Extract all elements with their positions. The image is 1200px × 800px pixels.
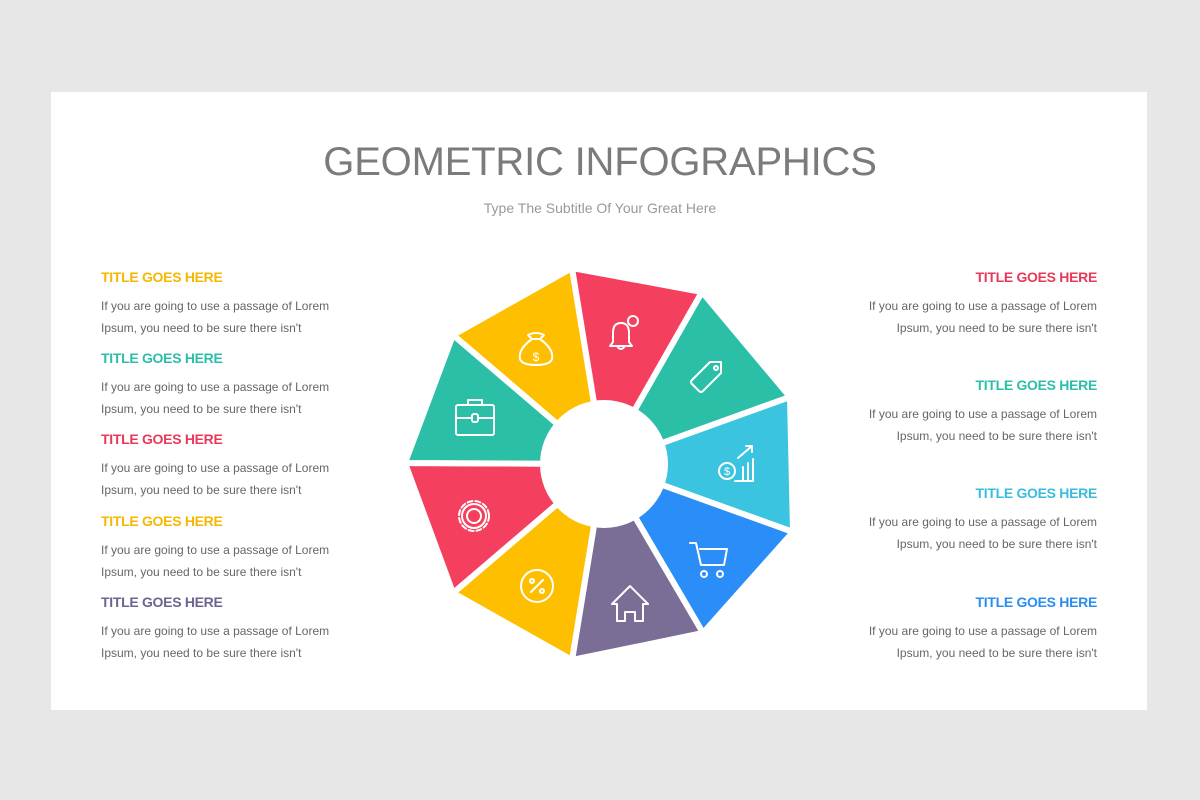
title: GEOMETRIC INFOGRAPHICS [323,140,877,184]
icon: briefcase [456,400,494,435]
left item 3: TITLE GOES HERE [101,431,223,447]
icon: home [612,586,648,621]
left item 2: TITLE GOES HERE [101,350,223,366]
card [51,92,1147,710]
right item 1: TITLE GOES HERE [975,269,1097,285]
left item 4 [101,513,329,579]
right item 1: If you are going to use a passage of Lorem Ipsum, you need to be sure there isn't [869,299,1097,335]
icon: bell [610,316,638,349]
left item 1 [101,269,329,335]
right item 2 [869,377,1097,443]
left item 1: TITLE GOES HERE [101,269,223,285]
segment red top [572,268,702,464]
left item 3 [101,431,329,497]
segment teal top-right [604,292,790,464]
icon: chart coin: $ [724,466,730,478]
icon: gear [459,501,489,531]
segment red left [405,463,604,593]
left item 4: If you are going to use a passage of Lorem Ipsum, you need to be sure there isn't [101,543,329,579]
right item 3: TITLE GOES HERE [975,485,1097,501]
right item 2: If you are going to use a passage of Lorem Ipsum, you need to be sure there isn't [869,407,1097,443]
right item 3 [869,485,1097,551]
segment yellow top [453,268,604,464]
right item 4: TITLE GOES HERE [975,594,1097,610]
right item 4: If you are going to use a passage of Lorem Ipsum, you need to be sure there isn't [869,624,1097,660]
right item 4 [869,594,1097,660]
right item 1 [869,269,1097,335]
segment purple [572,464,703,660]
left item 4: TITLE GOES HERE [101,513,223,529]
left item 5 [101,594,329,660]
icon: money bag [520,333,552,365]
left item 2: If you are going to use a passage of Lorem Ipsum, you need to be sure there isn't [101,380,329,416]
segment yellow bottom [453,464,604,660]
left item 1: If you are going to use a passage of Lorem Ipsum, you need to be sure there isn't [101,299,329,335]
right item 2: TITLE GOES HERE [975,377,1097,393]
center circle [540,400,668,528]
icon: chart coin [719,446,753,481]
segment cyan [604,397,793,532]
icon: money bag: $ [533,350,540,364]
right item 3: If you are going to use a passage of Lorem Ipsum, you need to be sure there isn't [869,515,1097,551]
segment teal left [405,335,604,464]
left item 3: If you are going to use a passage of Lorem Ipsum, you need to be sure there isn't [101,461,329,497]
left item 2 [101,350,329,416]
left item 5: If you are going to use a passage of Lorem Ipsum, you need to be sure there isn't [101,624,329,660]
subtitle: Type The Subtitle Of Your Great Here [484,200,716,216]
segment blue [604,464,793,633]
icon: percent badge [521,570,553,602]
icon: tag [691,362,721,392]
left item 5: TITLE GOES HERE [101,594,223,610]
icon: cart [690,543,727,577]
